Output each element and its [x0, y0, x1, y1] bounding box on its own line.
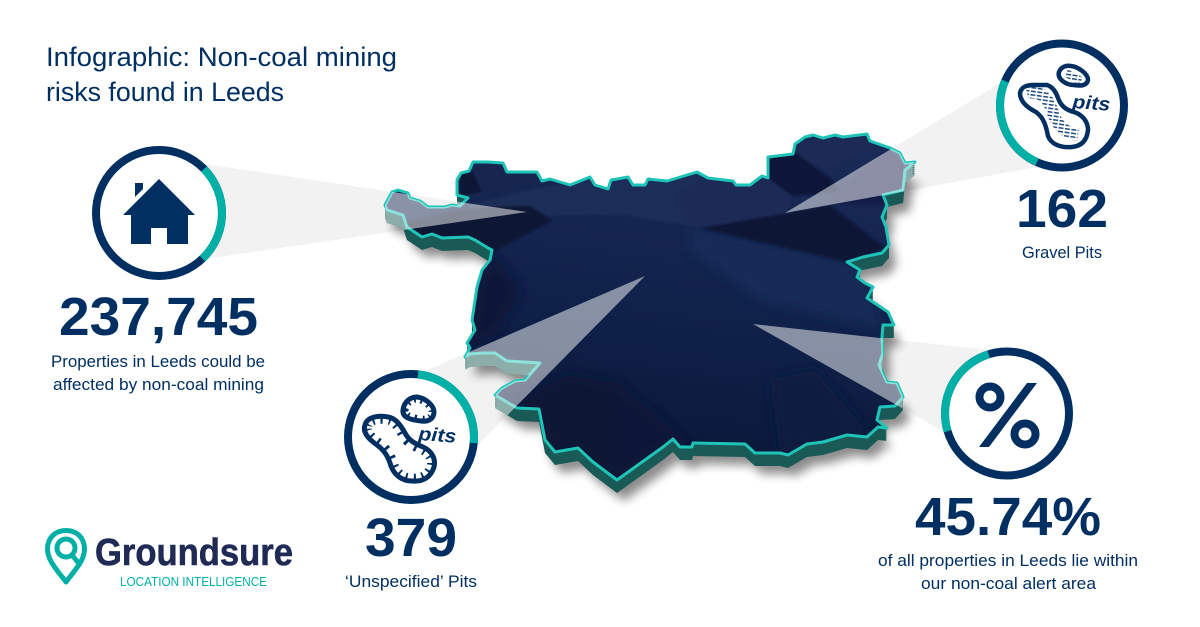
panel: percentage of properties	[878, 352, 1138, 593]
icon: gravel pits in ring	[1000, 44, 1124, 168]
caption: percentage: of all properties in Leeds lie within	[878, 552, 1138, 570]
number: 379: 379	[365, 508, 457, 568]
title: Infographic: Non-coal mining	[46, 42, 397, 72]
title: risks found in Leeds	[46, 77, 284, 107]
icon: house in ring	[96, 150, 222, 276]
number: 162: 162	[1016, 179, 1108, 239]
map of Leeds	[385, 132, 922, 501]
caption: gravel pits: Gravel Pits	[1022, 244, 1102, 262]
caption: properties: affected by non-coal mining	[53, 376, 264, 394]
number: 237,745: 237,745	[59, 287, 258, 347]
light beams over the map	[385, 148, 915, 416]
panel: unspecified pits	[345, 374, 477, 591]
panel: gravel pits	[1000, 44, 1124, 262]
icon: percent in ring	[945, 352, 1069, 476]
logo: Groundsure	[48, 530, 293, 589]
caption: percentage	[878, 552, 1138, 593]
caption: properties	[51, 353, 265, 394]
light beams behind the map	[205, 82, 1037, 445]
title	[46, 42, 397, 107]
logo: Groundsure: LOCATION INTELLIGENCE	[120, 575, 267, 589]
icon: unspecified pits in ring: pits	[417, 424, 457, 448]
caption: properties: Properties in Leeds could be	[51, 353, 265, 371]
panel: properties affected	[51, 150, 265, 394]
icon: location pin with magnifier	[48, 530, 84, 582]
number: 45.74%: 45.74%	[915, 487, 1101, 547]
icon: gravel pits in ring: pits	[1071, 92, 1111, 116]
icon: unspecified pits in ring	[348, 374, 474, 500]
logo: Groundsure: Groundsure	[95, 532, 293, 574]
caption: unspecified pits: ‘Unspecified’ Pits	[345, 573, 477, 591]
caption: percentage: our non-coal alert area	[921, 575, 1097, 593]
